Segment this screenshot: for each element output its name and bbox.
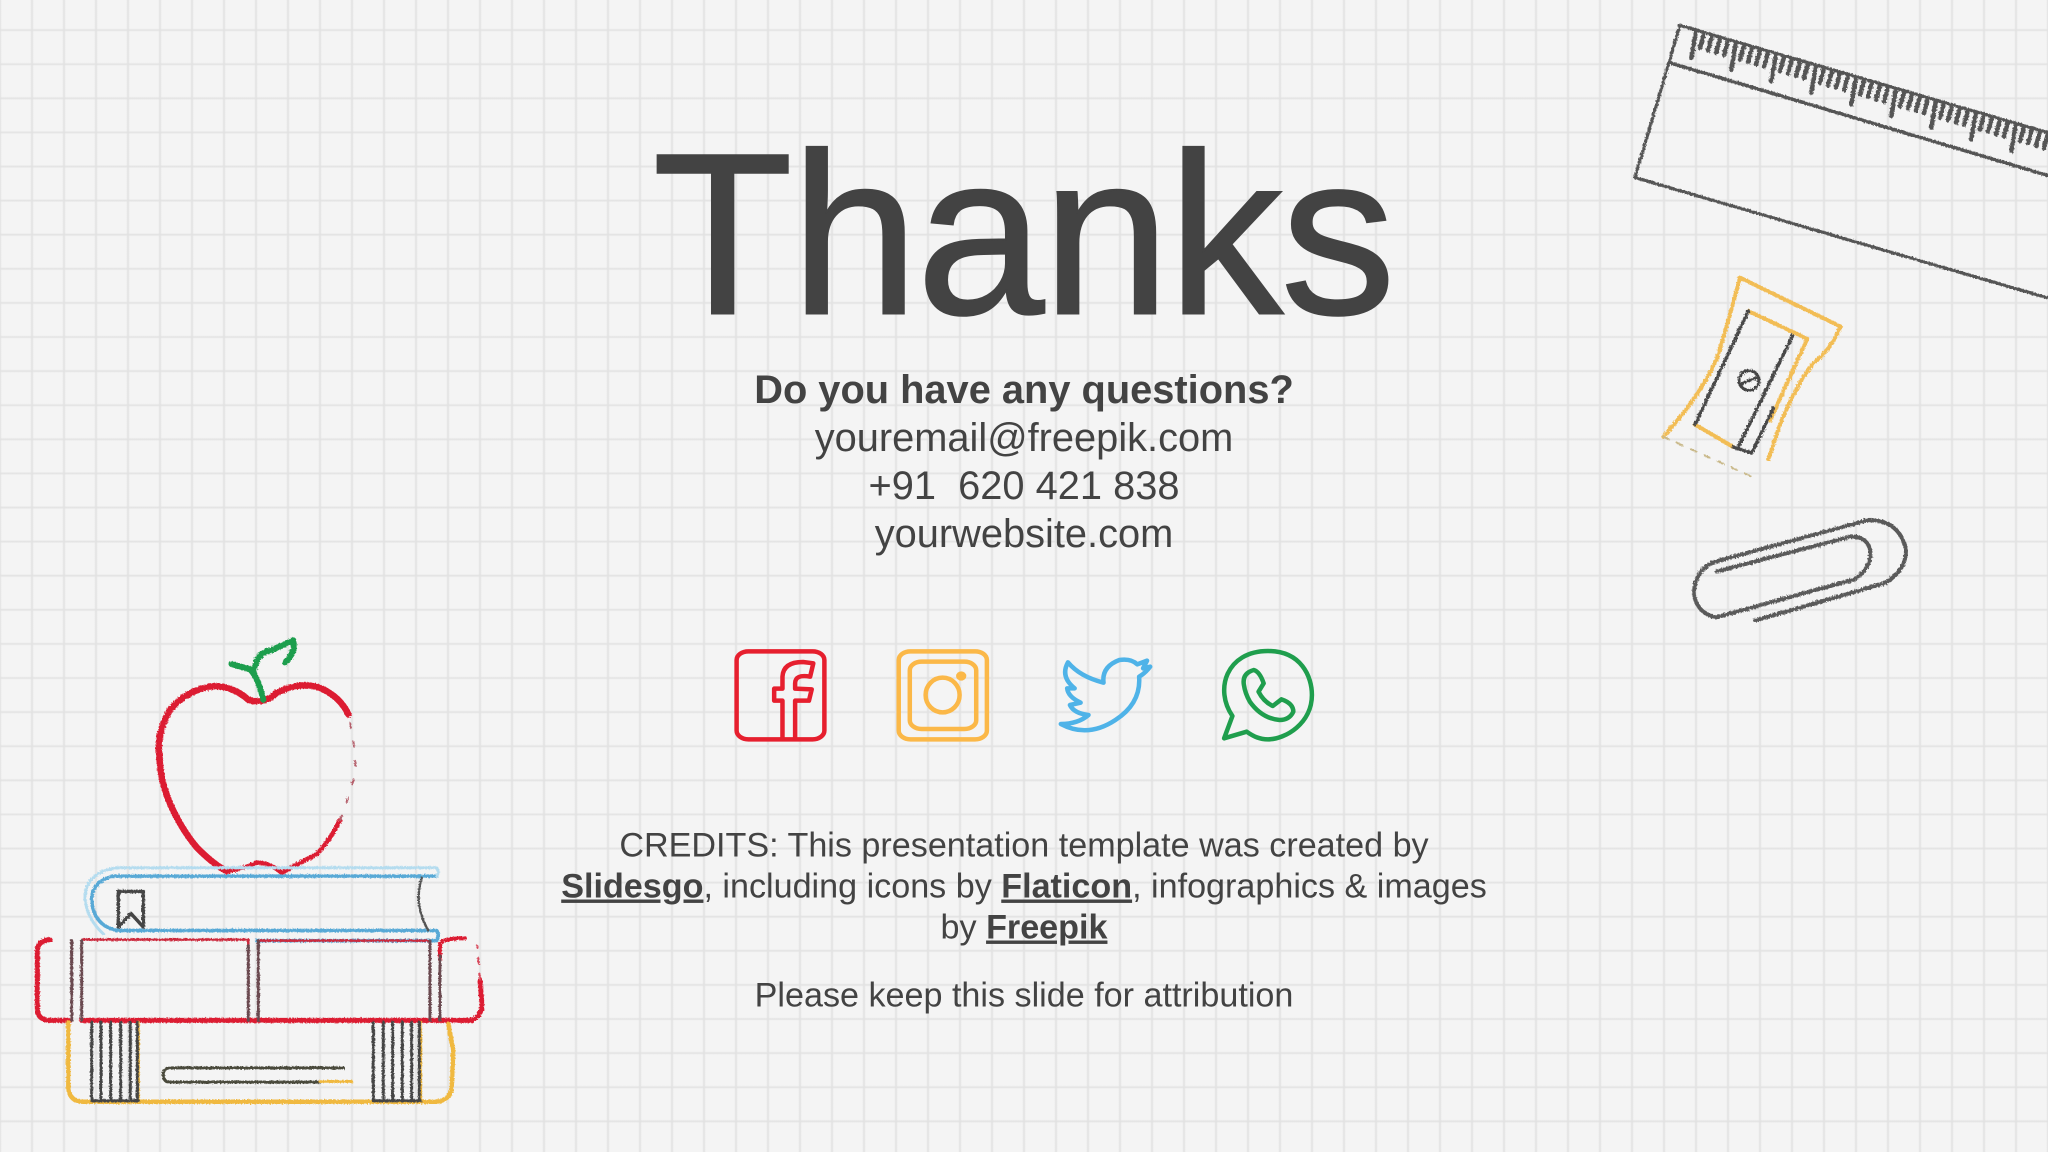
attribution note: Please keep this slide for attribution	[755, 976, 1293, 1014]
book title label	[163, 1068, 343, 1082]
sharpener faint base	[1663, 437, 1758, 480]
ruler outline	[1635, 25, 2048, 298]
illustration: pencil sharpener	[1663, 278, 1841, 480]
social icons row	[737, 651, 1312, 739]
top blue book	[85, 868, 438, 941]
bottom yellow book	[68, 1022, 453, 1102]
icon: facebook	[737, 651, 824, 739]
illustration: ruler	[1635, 25, 2048, 298]
illustration: apple on stacked books	[37, 640, 482, 1102]
phone: +91 620 421 838	[869, 464, 1179, 508]
icon: twitter	[1061, 660, 1150, 730]
email: youremail@freepik.com	[815, 416, 1233, 460]
sharpener blade	[1695, 311, 1793, 453]
ruler ticks	[1691, 33, 2048, 163]
sharpener body	[1663, 278, 1841, 459]
bookmark	[118, 891, 143, 927]
title: Thanks	[652, 106, 1394, 362]
contact block	[754, 368, 1294, 556]
question heading: Do you have any questions?	[754, 368, 1294, 412]
website: yourwebsite.com	[875, 512, 1173, 556]
apple	[159, 685, 355, 873]
credits block	[561, 826, 1487, 1014]
credits line 2: Slidesgo, including icons by Flaticon, infographics & images	[561, 868, 1487, 906]
credits line 3: by Freepik	[941, 908, 1108, 946]
ruler inner edge	[1672, 63, 2048, 176]
apple stem and leaf	[232, 640, 294, 700]
sharpener screw	[1739, 371, 1759, 390]
illustration: paperclip	[1694, 520, 1906, 620]
book pages edge	[419, 878, 428, 930]
credits line 1: CREDITS: This presentation template was created by	[619, 826, 1429, 864]
sharpener inner plate	[1695, 311, 1807, 447]
middle red book	[37, 938, 482, 1020]
icon: instagram	[899, 651, 987, 739]
icon: whatsapp	[1224, 651, 1312, 739]
